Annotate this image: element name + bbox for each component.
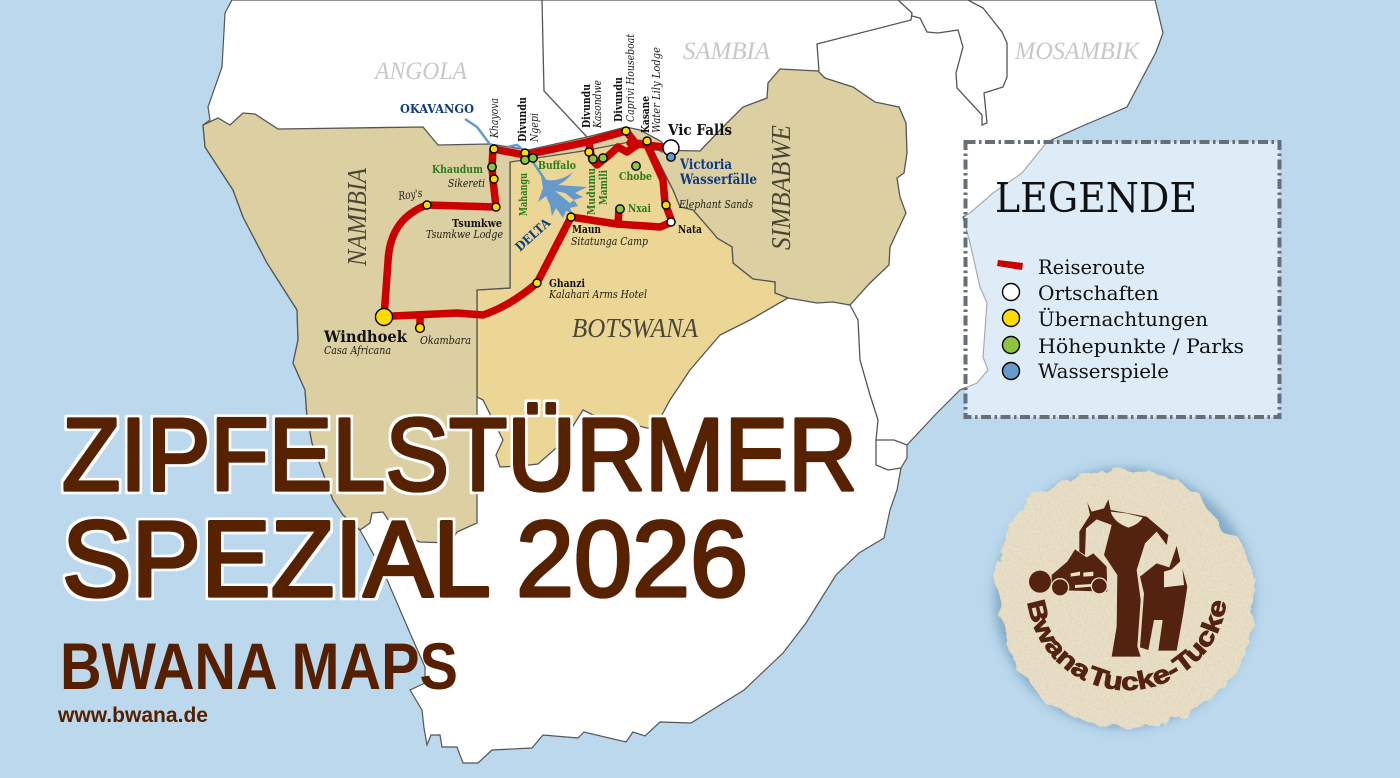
medallion paper [993,468,1255,729]
legend swatch: overnight [1002,310,1020,326]
logo text: Bwana Tucke-Tucke [1027,599,1226,691]
label: Elephant Sands: Elephant Sands [678,197,753,211]
route: red travel line [384,131,672,328]
label: Nata: Nata [678,222,702,236]
country: Botswana [477,138,788,467]
map markers [376,127,679,332]
label: Maun: Maun [572,222,601,236]
legend text: Reiseroute: Reiseroute [1038,255,1145,279]
label: Divundu Ngepi: Divundu [515,97,529,142]
label: Windhoek: Windhoek [323,327,408,346]
label: Sikereti: Sikereti [448,176,485,190]
legend box [966,142,1280,417]
label: Water Lily Lodge: Water Lily Lodge [649,47,663,133]
country label: Sambia: SAMBIA [683,38,771,65]
label: Kasane: Kasane [638,96,652,133]
country label: Angola: ANGOLA [373,58,468,85]
label: Sitatunga Camp: Sitatunga Camp [571,234,649,248]
label: Casa Africana: Casa Africana [324,343,391,357]
label: Chobe: Chobe [619,169,652,183]
land mass [203,0,1163,763]
label: Mahangu: Mahangu [516,173,530,216]
country: Simbabwe [653,69,907,305]
label: Roy's: Roy's [397,186,423,203]
label: Ghanzi: Ghanzi [549,276,585,290]
rear elephant [1140,546,1187,651]
elephant highlights [1111,512,1184,587]
highlight markers [488,154,640,213]
label: Delta: DELTA [512,215,553,254]
label: Kasondwe: Kasondwe [590,80,604,129]
legend text: Übernachtungen: Übernachtungen [1038,306,1208,331]
medallion shadow [994,468,1254,728]
logo: paper medallion [990,464,1258,732]
route section: Mudumu side loop [589,143,637,165]
website address: www.bwana.de [57,704,208,727]
river: Okavango and delta [465,119,587,218]
label: Mamili: Mamili [596,170,610,205]
label: Buffalo: Buffalo [538,158,576,172]
legend heading: LEGENDE [995,174,1197,222]
label: Kalahari Arms Hotel: Kalahari Arms Hotel [548,287,647,301]
route section: Okambara spur [416,317,424,328]
label: Ngepi: Ngepi [527,113,541,143]
overnight markers [376,127,670,332]
logo art: elephants and car [1029,499,1187,657]
front elephant [1079,499,1168,657]
route section: Nata to Maun [571,217,672,227]
legend text: Höhepunkte / Parks: Höhepunkte / Parks [1038,334,1244,358]
delta shape [538,172,587,218]
label: Khayova: Khayova [487,98,501,139]
label: Tsumkwe: Tsumkwe [452,216,502,230]
map: southern Africa land [203,0,1163,763]
panel: legend [966,142,1280,417]
car windows [1071,572,1093,588]
label: Okavango: OKAVANGO [400,101,474,116]
country label: Mosambik: MOSAMBIK [1014,38,1140,65]
title: line one: ZIPFELSTÜRMER [62,397,857,512]
label: Tsumkwe Lodge: Tsumkwe Lodge [426,227,503,241]
town markers [663,140,679,226]
label: Victoria: Victoria [679,157,732,173]
label: Khaudum: Khaudum [432,162,483,176]
legend text: Ortschaften: Ortschaften [1038,281,1159,305]
route section: Windhoek to Divundu [384,131,637,317]
legend swatch: towns [1002,284,1020,300]
country label: Namibia: NAMIBIA [342,168,372,267]
subtitle: Bwana Maps: BWANA MAPS [60,629,458,703]
route section: Nxai spur [618,209,619,224]
label: Vic Falls: Vic Falls [667,121,732,139]
old car [1052,549,1107,592]
country: Namibia [203,113,662,543]
label: Wasserfälle: Wasserfälle [679,172,757,188]
title: line two: SPEZIAL 2026 [62,498,748,619]
car spare wheel [1029,571,1051,593]
country label: Botswana: BOTSWANA [572,313,698,343]
route section: Maun to Windhoek [393,217,571,316]
river line [465,119,545,180]
legend swatch: highlights [1002,336,1020,354]
label: Divundu Kasondwe: Divundu [579,84,593,128]
place labels [323,34,757,357]
route section: Kasane to Nata [647,145,672,222]
label: Caprivi Houseboat: Caprivi Houseboat [623,34,637,122]
water marker: Victoria Falls [667,153,675,161]
label: Mudumu: Mudumu [584,168,598,215]
legend swatch: route [997,260,1023,270]
label: Divundu Caprivi: Divundu [611,77,625,122]
country label: Simbabwe: SIMBABWE [766,125,796,250]
label: Nxai: Nxai [628,201,651,215]
legend text: Wasserspiele: Wasserspiele [1038,359,1169,383]
country borders: neighbours [542,0,1007,470]
car rear wheel [1091,578,1107,594]
car front wheel [1051,579,1069,596]
legend swatch: water [1002,362,1020,380]
label: Okambara: Okambara [420,333,471,347]
route section: Kasane to Vic Falls [630,143,672,148]
